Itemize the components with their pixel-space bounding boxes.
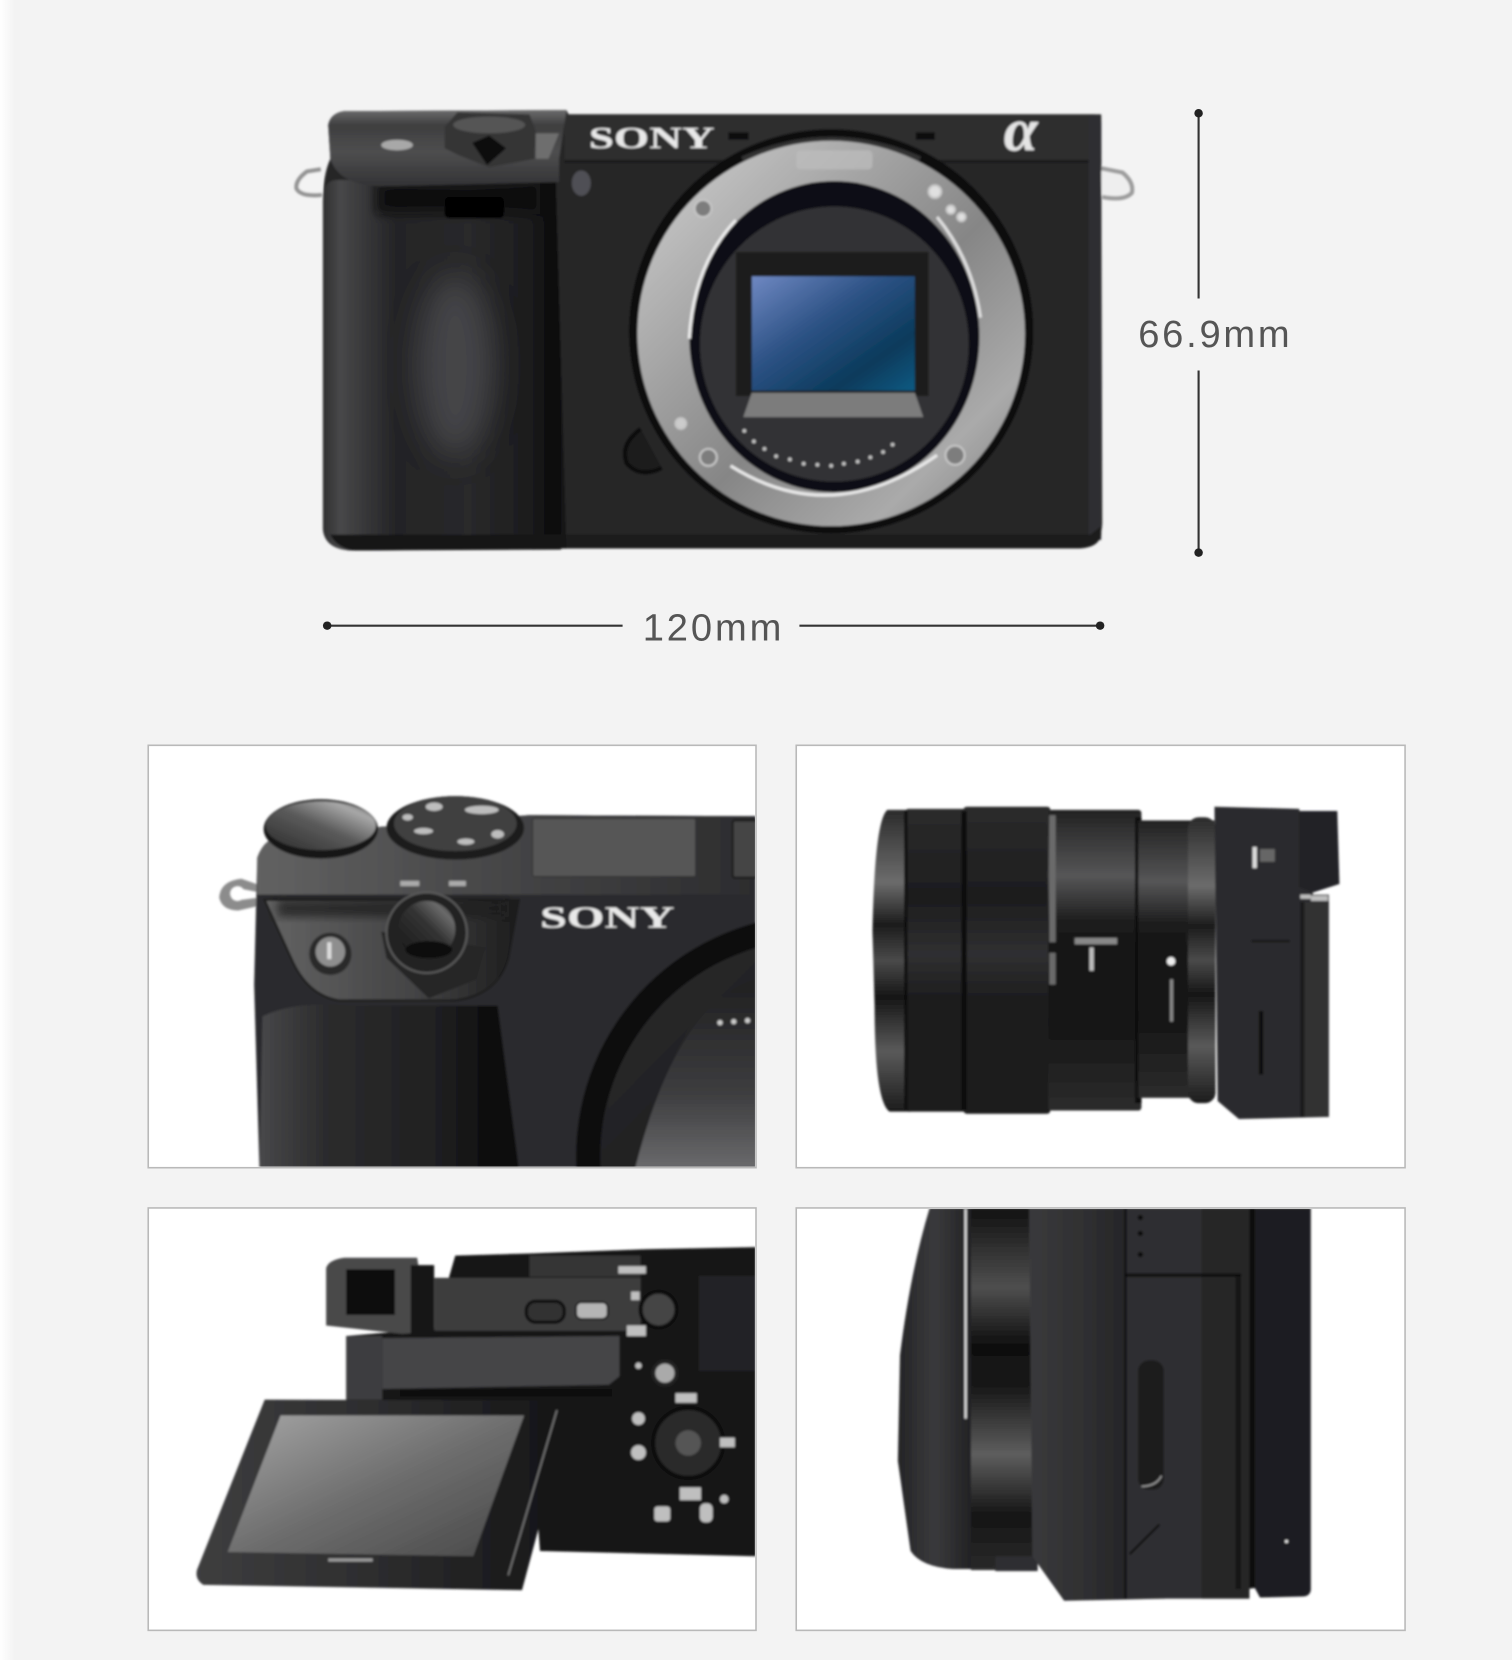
shutter dial: [264, 799, 378, 859]
viewfinder edge: [733, 820, 758, 878]
viewfinder: [326, 1258, 434, 1334]
panel: grip side view: [796, 1208, 1405, 1630]
mirror box: [736, 252, 929, 396]
small top button: [381, 140, 413, 150]
grip: [259, 1004, 519, 1168]
alpha mark: α: [1004, 96, 1039, 164]
strap lug: [219, 879, 259, 910]
tilting LCD: [197, 1400, 573, 1590]
power button: [309, 933, 352, 975]
control dial: [381, 892, 485, 998]
dial markings: [400, 881, 466, 886]
tiny light: [1285, 1540, 1288, 1543]
mode dial: [386, 796, 524, 860]
mount screws: [676, 185, 966, 466]
right grip block: [699, 1276, 756, 1371]
sensor lamp: [572, 170, 591, 196]
lens mount: [629, 129, 1033, 534]
rear module: [1252, 1208, 1311, 1598]
hinge flap: [382, 1336, 619, 1389]
height dimension: [1138, 109, 1290, 557]
status dots: [1138, 1215, 1143, 1257]
barrel edge marks: [1049, 815, 1056, 985]
top plate: [564, 114, 1101, 548]
lens: [258, 816, 755, 1167]
panel: rear tilting screen: [148, 1208, 756, 1630]
panel: lens side view: [796, 745, 1405, 1168]
camera body side: [1214, 807, 1329, 1119]
rear body: [346, 1247, 756, 1556]
body side: [1029, 1208, 1256, 1601]
handgrip: [323, 180, 566, 551]
hinge area left: [346, 1336, 382, 1400]
grip: [898, 1208, 979, 1569]
right controls: [526, 1266, 735, 1522]
viewfinder: [1299, 811, 1339, 892]
grey top edge: [529, 1256, 641, 1277]
left strap lug: [296, 169, 322, 195]
main camera front view: [296, 96, 1132, 551]
flash cover: [533, 818, 696, 877]
hinge shadow strip: [400, 1389, 612, 1396]
camera body: [323, 110, 1102, 551]
panel: top detail: [148, 744, 757, 1168]
SONY logo: SONY: [540, 900, 674, 934]
top control band: [434, 1278, 641, 1331]
image sensor: [752, 276, 915, 391]
ring separators: [904, 811, 1141, 1109]
control dial: [445, 112, 559, 167]
lens release button: [625, 429, 662, 472]
SONY logo: SONY: [589, 121, 715, 155]
width label: 120mm: [643, 607, 781, 649]
electrical contacts: [742, 429, 894, 468]
ring base: [995, 1556, 1038, 1571]
card slot: [1259, 1011, 1263, 1075]
recess around control dial: [265, 900, 519, 1000]
lens barrel: [1048, 810, 1141, 1111]
screen side: [1328, 1116, 1329, 1117]
width dimension: [323, 607, 1104, 649]
recess shadow: [277, 900, 505, 917]
front element: [872, 810, 911, 1112]
height label: 66.9mm: [1138, 314, 1290, 356]
right strap lug: [1101, 168, 1132, 198]
mount ring: [971, 1208, 1037, 1570]
silver edge line: [965, 1209, 967, 1419]
mount neck: [1138, 820, 1214, 1098]
camera body top: [254, 815, 756, 1168]
side details: [1075, 847, 1328, 1022]
top plate slots: [728, 132, 935, 140]
zoom ring: [964, 807, 1050, 1114]
focus ring: [905, 809, 969, 1112]
lower reflector: [743, 393, 923, 417]
card door: [1124, 1208, 1249, 1599]
grip top shoulder: [328, 110, 566, 186]
